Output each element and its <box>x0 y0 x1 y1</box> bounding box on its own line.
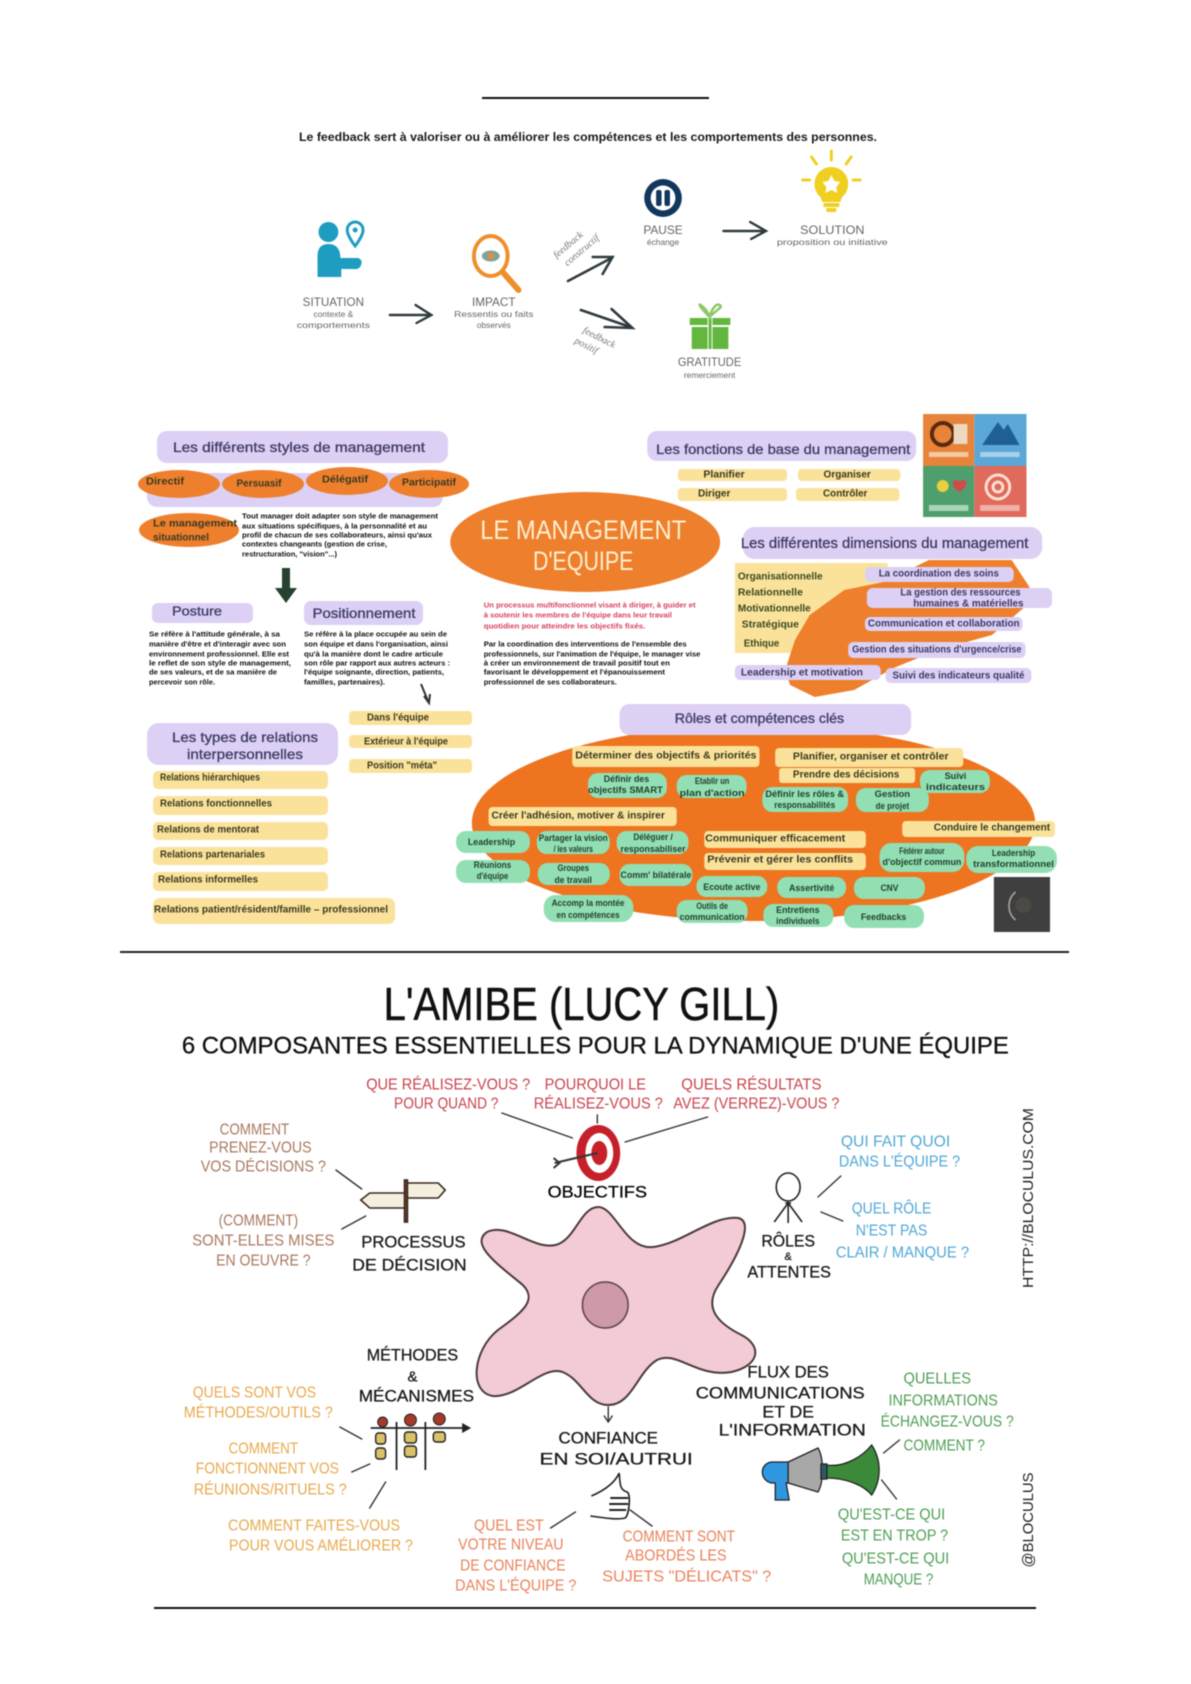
impact label: observés <box>477 320 511 330</box>
text: red definition <box>484 602 696 631</box>
questions: confiance left: VOTRE NIVEAU <box>458 1536 564 1554</box>
gratitude label: GRATITUDE <box>678 355 741 369</box>
skill group: yellow labels: Conduire le changement <box>934 822 1051 834</box>
vertical url: HTTP://BLOCULUS.COM <box>1020 1108 1037 1288</box>
situation label: SITUATION <box>303 295 364 309</box>
label: feedback positif: feedback <box>581 325 618 351</box>
skill group: yellow labels <box>492 750 1051 866</box>
image: four tiles <box>923 414 1026 517</box>
yellow block: dimensions: Ethique <box>744 638 780 650</box>
skill group: green labels: en compétences <box>557 910 620 920</box>
text: positionnement: l'équipe soignante, direction, patients, <box>304 670 444 676</box>
skill group: yellow labels: Déterminer des objectifs & priorités <box>575 750 757 762</box>
heading: posture: Posture <box>172 604 222 618</box>
arrow: small down <box>421 684 430 703</box>
relation: fonctionnelles <box>153 796 328 815</box>
questions: roles: QUEL RÔLE <box>852 1198 931 1218</box>
skill group: green labels: Suivi <box>945 771 966 781</box>
text: posture: de ses valeurs, et de sa manière de <box>149 670 277 676</box>
lines: communications <box>882 1440 899 1499</box>
function: controler: Contrôler <box>823 488 868 500</box>
skill group: green labels: / les valeurs <box>554 844 593 854</box>
questions: confiance right <box>602 1528 771 1586</box>
text: positionnement: familles, partenaires). <box>304 680 385 686</box>
style: participatif <box>389 470 469 498</box>
gratitude label <box>678 355 741 380</box>
relation: mentorat: Relations de mentorat <box>157 824 260 836</box>
panel: roles et competences <box>456 704 1057 932</box>
dimension: ressources <box>867 587 1052 610</box>
skill group: green labels: Etablir un <box>695 776 729 786</box>
icon: person <box>774 1173 802 1223</box>
situation label: contexte & <box>314 309 354 319</box>
position: dans l'equipe: Dans l'équipe <box>367 712 429 724</box>
questions: communications bottom: EST EN TROP ? <box>841 1527 948 1545</box>
skill group: green labels: responsabilités <box>774 800 835 810</box>
lines: methodes <box>340 1427 386 1508</box>
questions: communications top: INFORMATIONS <box>889 1392 998 1410</box>
arrow: pause to solution <box>723 222 766 239</box>
text: black definition: professionnel de ses collaborateurs. <box>484 679 617 687</box>
questions: methodes <box>184 1384 413 1555</box>
section divider <box>120 951 1069 953</box>
yellow block: dimensions: Motivationnelle <box>738 603 811 615</box>
heading: posture <box>152 603 253 623</box>
decorative band <box>147 473 443 507</box>
icon: signpost <box>361 1180 445 1222</box>
skill group: green labels: indicateurs <box>926 782 985 792</box>
skill group: green labels: plan d'action <box>680 788 745 798</box>
icon: impact magnifier <box>474 236 518 290</box>
heading: fonctions: Les fonctions de base du management <box>656 441 910 457</box>
relation: patient <box>153 898 395 924</box>
relation: partenariales <box>153 847 328 865</box>
image: dark logo square <box>994 877 1050 932</box>
text: situationnel description: Tout manager doit adapter son style de management <box>242 514 439 520</box>
skill group: green labels: Déléguer / <box>633 832 673 842</box>
dimension: coordination <box>865 567 1014 582</box>
heading: dimensions <box>741 527 1042 559</box>
skill group: green labels: Définir des <box>604 774 649 784</box>
skill group: green labels: Réunions <box>474 860 511 870</box>
skill group: green labels: Assertivité <box>789 883 834 893</box>
arrow: confiance <box>604 1407 612 1422</box>
questions: confiance right: ABORDÉS LES <box>625 1545 727 1565</box>
skill group: yellow labels: Prévenir et gérer les conflits <box>707 854 854 866</box>
questions: communications top: COMMENT ? <box>903 1437 985 1455</box>
questions: roles: DANS L'ÉQUIPE ? <box>839 1151 960 1171</box>
label: methodes & mecanismes: MÉTHODES <box>367 1345 458 1365</box>
questions: methodes: MÉTHODES/OUTILS ? <box>184 1402 333 1422</box>
skill group: green labels <box>468 771 1054 926</box>
solution label <box>777 223 888 247</box>
questions: methodes: COMMENT FAITES-VOUS <box>228 1517 400 1535</box>
lines: confiance <box>551 1510 652 1528</box>
text: positionnement <box>304 632 450 686</box>
dimension: ressources: La gestion des ressources <box>900 587 1021 599</box>
pause label <box>643 223 683 247</box>
questions: confiance left <box>455 1517 577 1595</box>
skill group: yellow labels: Communiquer efficacement <box>705 833 846 845</box>
impact label <box>454 295 533 330</box>
arrow: situation to impact <box>390 305 431 323</box>
skill group: green labels: Partager la vision <box>539 833 608 843</box>
questions: roles: QUI FAIT QUOI <box>841 1133 950 1151</box>
label: methodes & mecanismes: MÉCANISMES <box>359 1386 474 1406</box>
label: roles & attentes: & <box>785 1251 792 1263</box>
skill group: green labels: Leadership <box>468 837 516 847</box>
heading: styles <box>157 431 448 463</box>
style: participatif: Participatif <box>402 478 457 488</box>
skill group: green labels: d'objectif commun <box>883 857 961 867</box>
orange ellipse title <box>450 492 720 592</box>
top rule <box>482 97 709 99</box>
label: roles & attentes <box>747 1231 831 1282</box>
questions: communications top <box>881 1370 1014 1455</box>
text: black definition <box>484 641 701 687</box>
questions: methodes: RÉUNIONS/RITUELS ? <box>194 1479 347 1499</box>
yellow block: dimensions: Stratégique <box>742 619 799 631</box>
le management situationnel <box>139 513 239 547</box>
skill group: green labels: Accomp la montée <box>552 898 625 908</box>
skill group: green labels: de travail <box>555 875 592 885</box>
panel: styles de management <box>138 431 469 703</box>
skill group: green labels: communication <box>680 912 745 922</box>
skill group: green labels: Outils de <box>696 901 728 911</box>
function: organiser <box>798 469 900 481</box>
label: confiance: CONFIANCE <box>559 1428 658 1448</box>
icon: kanban grid <box>371 1413 471 1470</box>
text: positionnement: son équipe et dans l'organisation, ainsi <box>304 642 448 648</box>
yellow block: dimensions <box>735 563 888 653</box>
solution label: SOLUTION <box>800 223 864 237</box>
skill group: green labels: CNV <box>881 883 898 893</box>
skill group: yellow labels: Planifier, organiser et contrôler <box>793 751 949 763</box>
function: planifier: Planifier <box>703 469 745 481</box>
relation: hierarchiques <box>153 771 328 789</box>
questions: confiance right: COMMENT SONT <box>623 1528 735 1546</box>
function: diriger: Diriger <box>698 488 731 500</box>
skill group: green labels: Entretiens <box>776 905 820 915</box>
text: situationnel description: aux situations spécifiques, à la personnalité et au <box>242 524 427 530</box>
panel: central title <box>450 492 720 687</box>
text: situationnel description: restructuration, "vision"...) <box>242 552 337 558</box>
heading: relations <box>147 723 338 765</box>
lines: objectifs <box>502 1113 708 1142</box>
label: roles & attentes: RÔLES <box>761 1231 815 1251</box>
relation: fonctionnelles: Relations fonctionnelles <box>160 798 272 810</box>
heading: fonctions <box>647 431 916 461</box>
questions: roles: CLAIR / MANQUE ? <box>836 1244 969 1262</box>
text: positionnement: Se réfère à la place occupée au sein de <box>304 632 447 638</box>
dimension: leadership <box>735 665 881 680</box>
text: black definition: professionnels, sur l'animation de l'équipe, le manager vise <box>484 651 701 659</box>
questions: confiance left: DE CONFIANCE <box>460 1557 566 1575</box>
text: posture: le reflet de son style de management, <box>149 660 291 668</box>
heading: positionnement <box>304 601 423 625</box>
position: meta: Position "méta" <box>367 760 437 772</box>
questions: objectifs: QUELS RÉSULTATS <box>681 1074 821 1094</box>
heading: relations: Les types de relations <box>172 729 318 745</box>
label: processus de decision: PROCESSUS <box>361 1232 466 1252</box>
text: positionnement: qu'à la manière dont le cadre articule <box>304 652 443 658</box>
questions: confiance left: DANS L'ÉQUIPE ? <box>455 1575 577 1595</box>
panel: dimensions du management <box>735 527 1052 697</box>
pause label: échange <box>647 237 679 247</box>
dimension: urgence: Gestion des situations d'urgence/crise <box>852 644 1022 656</box>
dimension: indicateurs <box>886 668 1031 683</box>
questions: methodes: FONCTIONNENT VOS <box>196 1460 339 1478</box>
function: diriger <box>678 488 787 501</box>
text: positionnement: son rôle par rapport aux autres acteurs : <box>304 660 450 668</box>
questions: roles: N'EST PAS <box>856 1222 927 1240</box>
questions: communications bottom <box>838 1506 949 1589</box>
le management situationnel: situationnel <box>153 532 209 544</box>
function: controler <box>796 488 899 501</box>
le management situationnel: Le management <box>153 518 238 530</box>
questions: decision: EN OEUVRE ? <box>216 1252 311 1270</box>
skill group: green labels: Comm' bilatérale <box>621 870 692 880</box>
skill group: green labels: Gestion <box>875 789 910 799</box>
dimension: communication: Communication et collaboration <box>868 618 1020 630</box>
skill group: green pills <box>456 770 1057 928</box>
questions: communications bottom: QU'EST-CE QUI <box>838 1506 945 1524</box>
skill group: green labels: responsabiliser <box>621 844 686 854</box>
orange ellipse background <box>472 725 1035 921</box>
orange ellipse title: D'EQUIPE <box>533 546 633 576</box>
questions: decision <box>192 1121 334 1270</box>
label: feedback constructif: constructif <box>562 232 603 269</box>
text: situationnel description: profil de chacun de ses collaborateurs, ainsi qu'aux <box>242 532 432 540</box>
skill group: green labels: Fédérer autour <box>899 846 945 856</box>
icon: gratitude gift <box>690 305 730 349</box>
text: black definition: Par la coordination des interventions de l'ensemble des <box>484 641 687 649</box>
function: organiser: Organiser <box>824 469 871 481</box>
text: black definition: à créer un environnement de travail positif tout en <box>484 660 670 668</box>
dimension: ressources: humaines & matérielles <box>913 598 1024 610</box>
label: processus de decision <box>352 1232 467 1275</box>
questions: methodes: QUELS SONT VOS <box>193 1384 316 1402</box>
skill group: green labels: Groupes <box>558 863 589 873</box>
style: delegatif: Délégatif <box>322 474 369 486</box>
questions: objectifs: POURQUOI LE <box>545 1076 646 1094</box>
relation: informelles: Relations informelles <box>158 874 258 886</box>
icon: thumbs up <box>590 1473 629 1519</box>
panel: feedback process <box>297 151 888 380</box>
text: posture <box>149 632 291 686</box>
position: exterieur: Extérieur à l'équipe <box>364 736 448 748</box>
icon: situation person <box>318 222 363 277</box>
icon: target <box>554 1125 620 1181</box>
questions: decision: COMMENT <box>220 1121 289 1139</box>
icon: megaphones <box>762 1445 879 1500</box>
text: posture: environnement professionnel. Elle est <box>149 652 290 658</box>
label: flux des communications: COMMUNICATIONS <box>696 1383 865 1403</box>
style: persuasif <box>222 470 304 498</box>
heading: roles: Rôles et compétences clés <box>675 710 844 726</box>
text: red definition: quotidien pour atteindre les objectifs fixés. <box>484 623 645 631</box>
yellow block: dimensions: Relationnelle <box>738 587 803 599</box>
text: red definition: Un processus multifonctionnel visant à diriger, à guider et <box>484 602 696 610</box>
questions: methodes: COMMENT <box>229 1440 298 1458</box>
text: posture: percevoir son rôle. <box>149 680 215 686</box>
questions: confiance right: SUJETS "DÉLICATS" ? <box>602 1566 771 1586</box>
situation label <box>297 295 370 330</box>
skill group: green labels: Feedbacks <box>861 912 906 922</box>
relation: patient: Relations patient/résident/famille – professionnel <box>154 904 388 916</box>
label: objectifs: OBJECTIFS <box>548 1182 647 1202</box>
pause label: PAUSE <box>643 223 683 237</box>
lines: roles <box>818 1176 843 1221</box>
feedback heading: Le feedback sert à valoriser ou à améliorer les compétences et les comportements des personnes. <box>299 130 877 144</box>
skill group: green labels: d'équipe <box>477 871 508 881</box>
gratitude label: remerciement <box>684 370 736 380</box>
style: directif <box>138 470 220 498</box>
text: posture: Se réfère à l'attitude générale, à sa <box>149 632 280 638</box>
skill group: yellow labels: Prendre des décisions <box>793 769 900 781</box>
panel: amibe <box>182 978 1037 1595</box>
vertical handle: @BLOCULUS <box>1020 1472 1037 1568</box>
questions: objectifs: QUE RÉALISEZ-VOUS ? <box>366 1074 530 1094</box>
style: delegatif <box>306 467 388 495</box>
yellow block: dimensions: Organisationnelle <box>738 571 823 583</box>
title: amibe: L'AMIBE (LUCY GILL) <box>384 978 779 1030</box>
relation: partenariales: Relations partenariales <box>160 850 265 860</box>
label: feedback constructif: feedback <box>551 229 586 261</box>
lines: decision <box>336 1170 366 1229</box>
style: persuasif: Persuasif <box>236 478 282 490</box>
text: situationnel description: contextes changeants (gestion de crise, <box>242 542 387 548</box>
dimension: urgence <box>848 642 1025 658</box>
position: dans l'equipe <box>349 711 472 725</box>
questions: confiance left: QUEL EST <box>474 1517 544 1535</box>
panel: fonctions de base <box>647 414 1026 517</box>
skill group: green labels: de projet <box>876 801 909 811</box>
skill group: green labels: objectifs SMART <box>588 785 663 795</box>
amoeba body <box>477 1207 755 1405</box>
questions: objectifs: AVEZ (VERREZ)-VOUS ? <box>673 1095 839 1113</box>
label: processus de decision: DE DÉCISION <box>352 1255 467 1275</box>
heading: styles: Les différents styles de management <box>173 439 425 455</box>
dimension: leadership: Leadership et motivation <box>741 667 863 679</box>
relation: informelles <box>153 872 328 891</box>
text: situationnel description <box>242 514 439 558</box>
style: directif: Directif <box>146 476 185 488</box>
arrow: to gratitude <box>581 309 632 328</box>
orange blob <box>785 560 1029 697</box>
label: roles & attentes: ATTENTES <box>747 1262 831 1282</box>
label: confiance: EN SOI/AUTRUI <box>540 1449 693 1469</box>
questions: communications bottom: MANQUE ? <box>864 1571 933 1589</box>
position: exterieur <box>349 735 472 748</box>
skill group: green labels: Ecoute active <box>703 882 760 892</box>
questions: objectifs <box>366 1074 839 1113</box>
questions: decision: VOS DÉCISIONS ? <box>201 1156 326 1176</box>
skill group: green labels: transformationnel <box>973 859 1054 869</box>
questions: decision: SONT-ELLES MISES <box>192 1232 334 1250</box>
label: methodes & mecanismes: & <box>407 1368 417 1386</box>
relation: hierarchiques: Relations hiérarchiques <box>160 772 260 784</box>
impact label: Ressentis ou faits <box>454 309 533 319</box>
panel: relations interpersonnelles <box>147 711 472 924</box>
questions: objectifs: RÉALISEZ-VOUS ? <box>534 1093 663 1113</box>
label: feedback constructif <box>551 222 603 271</box>
arrow: big down <box>275 568 297 603</box>
label: flux des communications <box>696 1362 866 1440</box>
skill group: green labels: individuels <box>776 916 820 926</box>
questions: communications bottom: QU'EST-CE QUI <box>842 1550 949 1568</box>
questions: decision: PRENEZ-VOUS <box>209 1139 312 1157</box>
heading: positionnement: Positionnement <box>312 605 416 621</box>
skill group: yellow labels: Créer l'adhésion, motiver & inspirer <box>492 810 665 822</box>
dimension: coordination: La coordination des soins <box>879 568 999 580</box>
text: posture: manière d'être et d'interagir avec son <box>149 642 286 648</box>
bottom rule <box>154 1607 1036 1609</box>
label: feedback positif: positif <box>572 335 601 357</box>
icon: solution bulb <box>803 151 860 212</box>
questions: communications top: QUELLES <box>903 1370 971 1388</box>
function: planifier <box>678 469 787 481</box>
relation: mentorat <box>153 822 328 840</box>
label: methodes & mecanismes <box>359 1345 474 1406</box>
skill group: yellow pills <box>489 746 1055 870</box>
questions: roles <box>836 1133 969 1262</box>
solution label: proposition ou initiative <box>777 237 888 247</box>
questions: methodes: POUR VOUS AMÉLIORER ? <box>229 1535 413 1555</box>
label: flux des communications: ET DE <box>762 1402 814 1422</box>
subtitle: amibe: 6 COMPOSANTES ESSENTIELLES POUR LA DYNAMIQUE D'UNE ÉQUIPE <box>182 1032 1009 1060</box>
skill group: green labels: Définir les rôles & <box>765 789 845 799</box>
questions: objectifs: POUR QUAND ? <box>394 1095 499 1113</box>
arrow: to pause <box>568 257 613 281</box>
dimension: indicateurs: Suivi des indicateurs qualité <box>893 670 1025 682</box>
label: confiance <box>540 1428 693 1469</box>
situation label: comportements <box>297 320 370 330</box>
position: meta <box>349 759 472 773</box>
questions: decision: (COMMENT) <box>219 1212 298 1230</box>
impact label: IMPACT <box>472 295 516 309</box>
skill group: green labels: Leadership <box>992 848 1036 858</box>
text: black definition: favorisant le développement et l'épanouissement <box>484 669 666 677</box>
questions: communications top: ÉCHANGEZ-VOUS ? <box>881 1411 1014 1431</box>
label: feedback positif <box>572 323 618 363</box>
heading: relations: interpersonnelles <box>187 746 303 762</box>
heading: dimensions: Les différentes dimensions du management <box>741 536 1029 552</box>
icon: pause <box>644 179 682 217</box>
label: flux des communications: L'INFORMATION <box>719 1420 866 1440</box>
text: red definition: à soutenir les membres de l'équipe dans leur travail <box>484 612 672 620</box>
label: flux des communications: FLUX DES <box>747 1362 829 1382</box>
orange ellipse title: LE MANAGEMENT <box>480 515 686 545</box>
heading: roles <box>620 704 911 735</box>
